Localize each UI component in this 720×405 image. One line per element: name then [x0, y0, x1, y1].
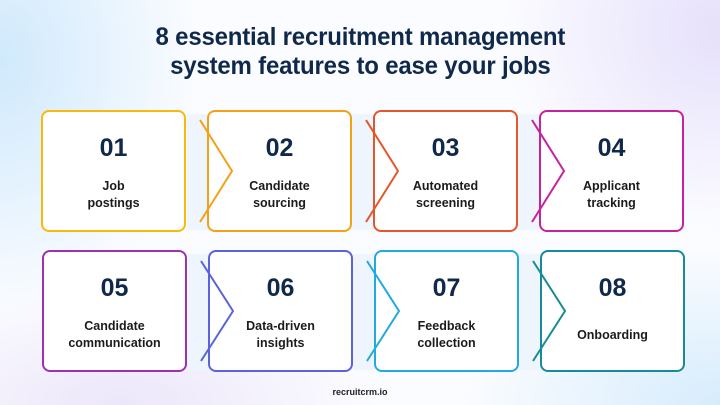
card 01: postings [87, 196, 140, 210]
card 04: tracking [587, 196, 636, 210]
card 08: 08 [599, 274, 626, 302]
card 03: Automated [413, 179, 478, 193]
card 05: Candidate [84, 319, 145, 333]
card 02 [207, 110, 352, 232]
card 05: communication [68, 336, 161, 350]
card 04 [539, 110, 684, 232]
card 04: 04 [598, 134, 625, 162]
card 05: 05 [101, 274, 128, 302]
card 02: Candidate [249, 179, 310, 193]
card 01: Job [102, 179, 125, 193]
card 03 [373, 110, 518, 232]
footer brand: recruitcrm.io [332, 387, 388, 397]
card 06: Data-driven [246, 319, 315, 333]
title: system features to ease your jobs [170, 52, 550, 80]
card 07: Feedback [418, 319, 475, 333]
card 07: 07 [433, 274, 460, 302]
card 07: collection [417, 336, 476, 350]
card 04: Applicant [583, 179, 640, 193]
card 01: 01 [100, 134, 127, 162]
card 06 [208, 250, 353, 372]
card 08: Onboarding [577, 328, 648, 342]
card 05 [42, 250, 187, 372]
card 07 [374, 250, 519, 372]
card 06: insights [257, 336, 304, 350]
card 06: 06 [267, 274, 294, 302]
card 03: 03 [432, 134, 459, 162]
card 01 [41, 110, 186, 232]
card 08 [540, 250, 685, 372]
title: 8 essential recruitment management [155, 23, 565, 51]
card 02: sourcing [253, 196, 306, 210]
card 02: 02 [266, 134, 293, 162]
title [155, 23, 566, 80]
card 03: screening [416, 196, 475, 210]
